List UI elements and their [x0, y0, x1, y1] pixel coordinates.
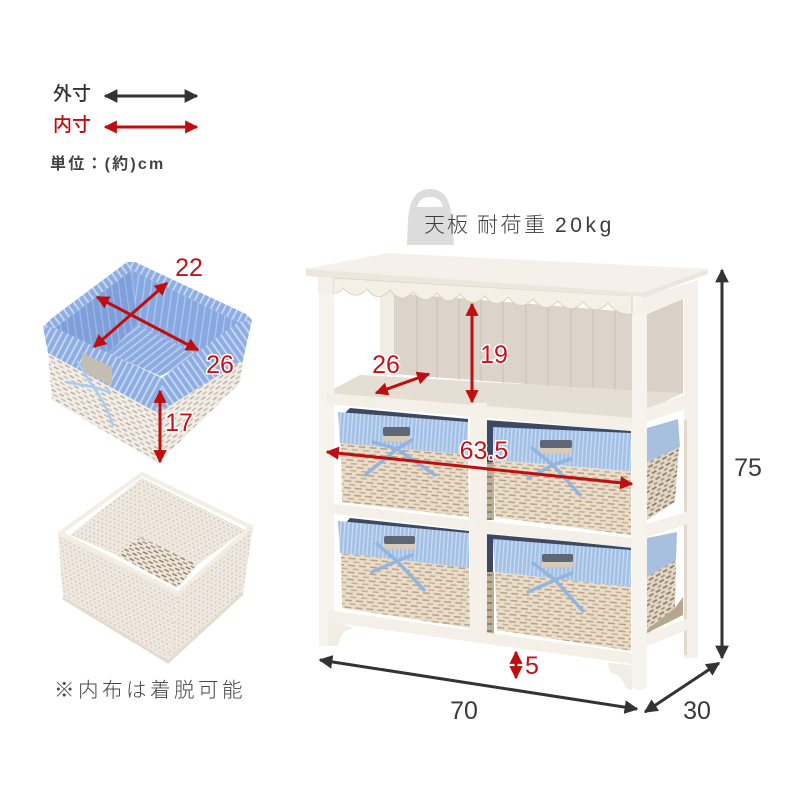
board grooves	[417, 295, 615, 391]
basket wicker left face	[48, 353, 158, 463]
dimension: clearance 5: 5	[525, 652, 539, 680]
label 26: 26	[206, 351, 234, 379]
side wicker lower	[647, 560, 676, 635]
dimension: inner width 63.5: 63.5	[460, 437, 508, 465]
icon: weight	[407, 189, 454, 245]
rear wicker between baskets upper	[486, 462, 494, 520]
right front leg	[632, 297, 647, 690]
load capacity label with weight icon	[407, 189, 615, 245]
side cloth upper	[647, 419, 680, 462]
removable lining note: ※内布は着脱可能	[54, 679, 246, 702]
basket 2	[493, 427, 631, 535]
inner width arrow 22	[94, 283, 167, 347]
side cloth lower	[647, 532, 677, 577]
rear left post	[380, 290, 394, 375]
inner depth arrow 26	[97, 297, 198, 350]
right inner side board	[647, 299, 683, 410]
lining back wall	[132, 270, 238, 357]
lined basket with inner dimensions	[43, 254, 252, 463]
dimension: overall depth 30	[645, 663, 719, 725]
lining left wall	[55, 270, 137, 353]
rim back-left	[43, 262, 132, 328]
top board surface	[306, 253, 708, 293]
rear wicker between baskets lower	[486, 572, 494, 634]
lining front cuff left	[43, 327, 162, 413]
left front leg	[319, 280, 334, 646]
side wicker upper	[647, 447, 679, 520]
dimension: overall width 70: 70	[450, 697, 478, 725]
load capacity text: 天板	[424, 214, 470, 237]
inner back wall	[140, 478, 245, 565]
lining floor	[108, 325, 203, 376]
basket wicker right face	[158, 360, 243, 463]
basket 4	[493, 539, 631, 651]
legend: inner dimension: 内寸	[53, 114, 91, 136]
basket 1	[338, 412, 469, 517]
side rail lower	[647, 617, 692, 646]
side rail middle	[647, 510, 692, 537]
legend: unit note: 単位：(約)cm	[50, 154, 165, 173]
ribbon bow	[66, 362, 113, 425]
dimension: shelf depth 26: 26	[372, 351, 400, 379]
dimension: shelf depth 26	[372, 351, 429, 393]
top apron with scallops	[318, 277, 632, 314]
top shelf surface	[326, 375, 682, 418]
label 17: 17	[165, 409, 193, 437]
basket rim	[60, 474, 251, 593]
furniture: shelf unit	[306, 253, 708, 690]
side apron	[632, 280, 698, 313]
legend: outer dimension: 外寸	[53, 83, 91, 105]
basket floor	[117, 537, 197, 588]
dimension: shelf height 19	[472, 304, 508, 402]
rear board	[380, 292, 632, 392]
inner left wall	[70, 478, 142, 555]
bare wicker basket	[58, 474, 253, 662]
legend	[50, 83, 197, 173]
basket 3	[338, 521, 470, 628]
top shelf front	[326, 393, 632, 431]
basket handle	[82, 353, 112, 386]
top board edge	[306, 268, 708, 297]
label 22: 22	[175, 254, 203, 282]
dimension: inner width 63.5	[327, 437, 632, 484]
right foot bracket	[608, 663, 632, 690]
bottom shelf front	[328, 610, 632, 664]
wicker left face	[58, 533, 178, 662]
dimension: overall depth 30: 30	[683, 697, 711, 725]
middle shelf front left	[328, 503, 470, 530]
side rail upper	[647, 391, 696, 422]
left leg top joint	[318, 277, 333, 293]
side floor strip lower	[647, 597, 683, 633]
load capacity text: 耐荷重	[477, 214, 548, 237]
basket base edge	[63, 593, 243, 662]
rear right post	[684, 282, 698, 658]
inner height arrow 17	[158, 391, 162, 462]
dimension: overall height 75: 75	[734, 454, 762, 482]
wicker right face	[168, 527, 253, 662]
dimension: clearance 5	[516, 652, 539, 680]
centre post	[470, 403, 487, 635]
dimension: shelf height 19: 19	[480, 341, 508, 369]
lining front cuff right	[158, 320, 252, 413]
middle shelf front right	[478, 520, 632, 548]
rim back-right	[127, 262, 252, 322]
dark gaps behind baskets	[345, 408, 631, 572]
rear right inner shade	[684, 420, 687, 655]
left foot bracket	[328, 620, 354, 646]
dimension: overall width 70	[320, 660, 637, 725]
load capacity text: 20kg	[555, 214, 615, 237]
